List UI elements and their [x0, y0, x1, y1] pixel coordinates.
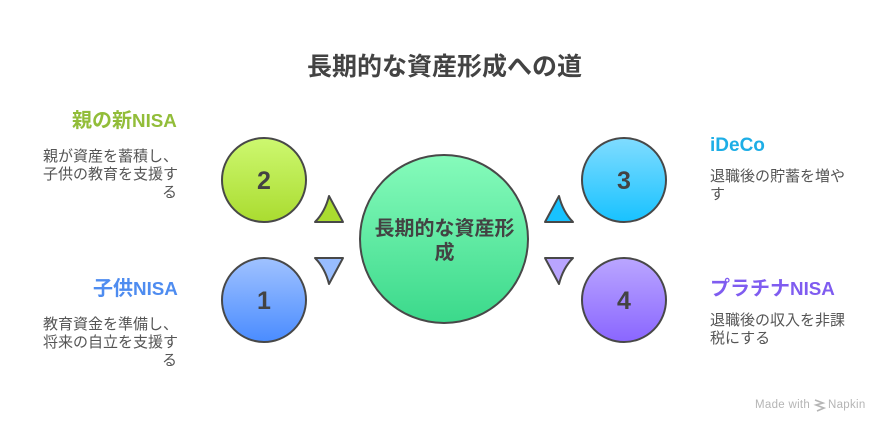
label: platinum NISA: 税にする: [710, 330, 770, 347]
central circle: 長期的な資産形: [374, 217, 514, 240]
label: parent NISA: る: [162, 184, 177, 201]
circle 3: [582, 138, 666, 222]
label: parent NISA: 親の新NISA: [72, 109, 177, 132]
circle 1: 1: [257, 287, 271, 315]
label: child NISA: 将来の自立を支援す: [43, 334, 178, 351]
central circle: 成: [434, 240, 454, 264]
label: platinum NISA: [710, 277, 845, 347]
label: parent NISA: [43, 109, 178, 201]
watermark: Made with Napkin: [755, 399, 866, 411]
circle 1: [222, 258, 306, 342]
label: platinum NISA: プラチナNISA: [710, 277, 835, 300]
central circle: [360, 155, 528, 323]
arrow: purple triangle: [545, 258, 573, 284]
arrow: blue triangle: [315, 258, 343, 284]
circle 3: 3: [617, 167, 631, 195]
label: child NISA: る: [162, 352, 177, 369]
circle 4: 4: [617, 287, 631, 315]
label: iDeCo: [710, 135, 845, 203]
arrow: cyan triangle: [545, 196, 573, 222]
label: iDeCo: iDeCo: [710, 135, 765, 156]
watermark: Made with Napkin: Napkin: [828, 399, 866, 411]
watermark: Made with Napkin: Made with: [755, 399, 810, 411]
label: iDeCo: 退職後の貯蓄を増や: [710, 168, 845, 185]
label: iDeCo: す: [710, 186, 725, 203]
label: child NISA: [43, 277, 178, 369]
label: platinum NISA: 退職後の収入を非課: [710, 312, 845, 329]
label: child NISA: 子供NISA: [93, 277, 178, 300]
circle 2: 2: [257, 167, 271, 195]
circle 2: [222, 138, 306, 222]
title: 長期的な資産形成への道: [307, 53, 582, 81]
label: child NISA: 教育資金を準備し、: [43, 316, 178, 333]
circle 4: [582, 258, 666, 342]
label: parent NISA: 子供の教育を支援す: [43, 166, 178, 183]
label: parent NISA: 親が資産を蓄積し、: [43, 148, 178, 165]
arrow: green triangle: [315, 196, 343, 222]
